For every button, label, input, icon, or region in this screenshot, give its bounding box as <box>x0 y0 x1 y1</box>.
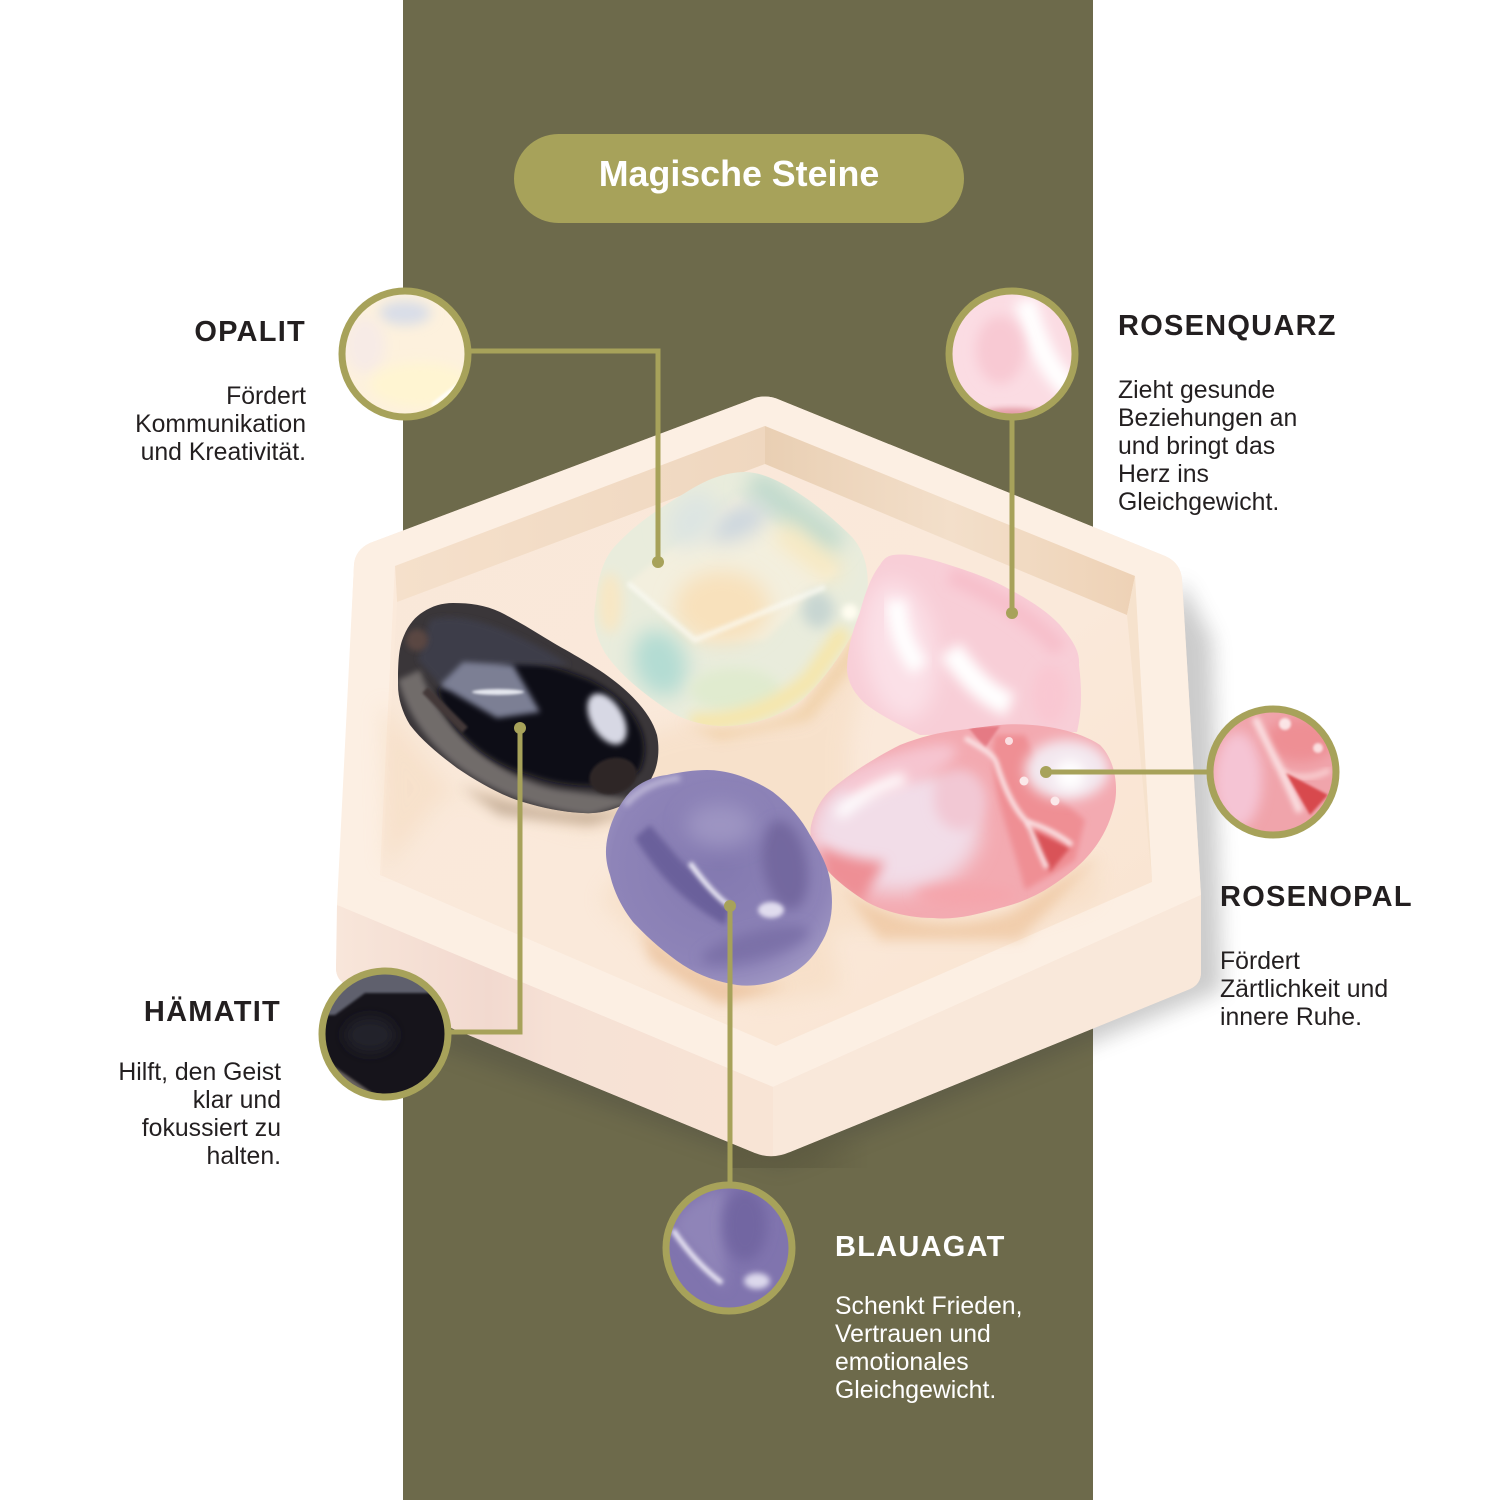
olive background band <box>403 0 1093 1500</box>
text block: Opalit: Fördert <box>226 383 306 410</box>
text block: Hämatit: Hilft, den Geist <box>118 1059 281 1086</box>
text block: Rosenopal <box>1220 881 1413 1031</box>
recess <box>380 426 1152 1046</box>
left side face <box>336 905 773 1156</box>
top rim <box>337 396 1201 1087</box>
text block: Rosenquarz: Herz ins <box>1118 461 1209 488</box>
back walls <box>395 426 765 602</box>
stone: rose quartz <box>847 554 1081 735</box>
hexagonal tray <box>336 396 1222 1168</box>
text block: Hämatit <box>118 995 281 1170</box>
tray shadow <box>420 580 1222 1168</box>
detail circle: Rosenopal <box>1209 708 1337 836</box>
text block: Hämatit: fokussiert zu <box>142 1115 281 1142</box>
text block: Rosenopal: Fördert <box>1220 948 1300 975</box>
metallic lower rim <box>398 670 640 815</box>
leader line: Hämatit <box>450 722 526 1032</box>
dark body <box>438 659 644 786</box>
text block: Rosenquarz: Gleichgewicht. <box>1118 489 1279 516</box>
text block: Hämatit: HÄMATIT <box>144 995 281 1028</box>
text block: Blauagat: Gleichgewicht. <box>835 1377 996 1404</box>
right side face <box>773 895 1201 1156</box>
tray contact shadow <box>730 1140 870 1168</box>
text block: Rosenopal: innere Ruhe. <box>1220 1004 1362 1031</box>
stone: hematite <box>395 600 660 825</box>
title pill: Magische Steine <box>599 154 879 194</box>
title pill <box>514 134 964 223</box>
text block: Hämatit: klar und <box>193 1087 281 1114</box>
stone: rose opal <box>805 720 1120 940</box>
detail circle: Opalit <box>341 290 470 418</box>
detail circle: Rosenquarz <box>948 290 1076 418</box>
detail circle: Hämatit <box>320 965 449 1100</box>
upper sheen <box>418 617 570 690</box>
text block: Blauagat: Schenkt Frieden, <box>835 1293 1022 1320</box>
text block: Blauagat: Vertrauen und <box>835 1321 991 1348</box>
leader line: Rosenopal <box>1040 766 1210 778</box>
text block: Rosenopal: ROSENOPAL <box>1220 881 1413 913</box>
text block: Opalit: Kommunikation <box>135 411 306 438</box>
detail circle: Blauagat <box>665 1184 793 1312</box>
text block: Rosenopal: Zärtlichkeit und <box>1220 976 1388 1003</box>
text block: Blauagat: emotionales <box>835 1349 969 1376</box>
text block: Rosenquarz: ROSENQUARZ <box>1118 310 1337 342</box>
text block: Opalit: OPALIT <box>194 316 306 348</box>
top face <box>636 534 815 628</box>
text block: Blauagat: BLAUAGAT <box>835 1231 1006 1263</box>
text block: Blauagat <box>835 1231 1022 1404</box>
text block: Rosenquarz: Beziehungen an <box>1118 405 1297 432</box>
text block: Hämatit: halten. <box>207 1143 281 1170</box>
text block: Rosenquarz: Zieht gesunde <box>1118 377 1275 404</box>
text block: Rosenquarz <box>1118 310 1337 516</box>
stone: opalite <box>585 465 875 740</box>
stone: blue agate <box>600 765 840 1005</box>
leader line: Blauagat <box>724 900 736 1185</box>
text block: Opalit <box>135 316 306 466</box>
text block: Rosenquarz: und bringt das <box>1118 433 1275 460</box>
leader line: Rosenquarz <box>1006 418 1018 619</box>
warm floor shadows <box>380 640 1100 1005</box>
text block: Opalit: und Kreativität. <box>141 439 306 466</box>
leader line: Opalit <box>470 351 664 568</box>
tray body <box>336 396 1201 1156</box>
